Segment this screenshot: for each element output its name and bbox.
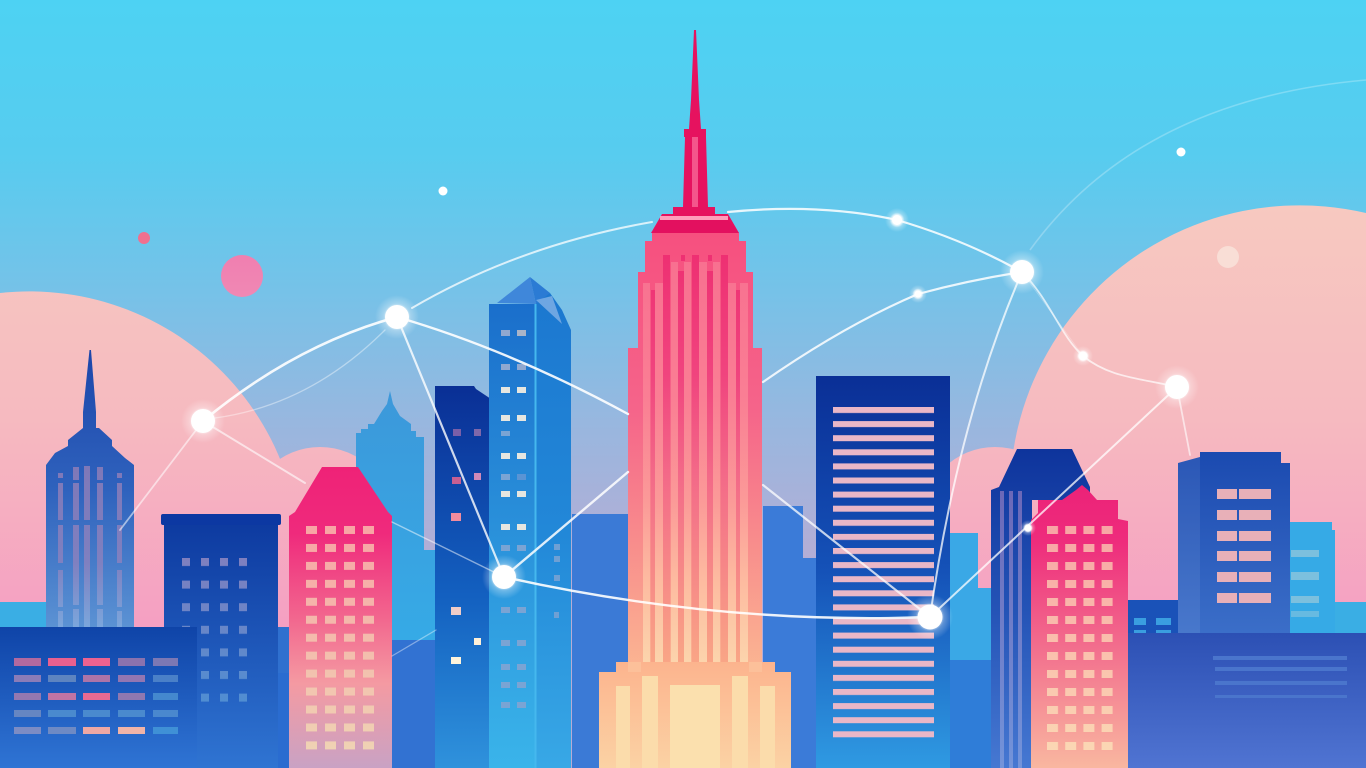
light stripes [643, 262, 748, 662]
roof cap [161, 514, 281, 525]
window rows [14, 658, 178, 734]
dark stripes [651, 255, 740, 662]
windows [451, 429, 481, 664]
windows [501, 330, 560, 708]
tower windows [58, 466, 122, 627]
windows [1047, 526, 1113, 750]
spire highlight [692, 137, 698, 207]
window stripes [833, 407, 934, 740]
right office tower [1178, 452, 1290, 636]
windows [306, 526, 374, 750]
network lines [120, 209, 1190, 656]
tower base [599, 662, 791, 768]
central art deco tower [599, 30, 791, 768]
dark tall tower [435, 386, 497, 768]
dark block tower [161, 514, 281, 768]
base panels [616, 662, 775, 768]
windows [182, 558, 247, 702]
pink tower left [289, 467, 392, 768]
floating dots [138, 148, 1239, 297]
small block [1128, 600, 1180, 636]
back blocks [278, 391, 992, 768]
left spire tower [46, 350, 134, 630]
shaft [599, 233, 791, 768]
stripes [1000, 491, 1022, 768]
spire [651, 30, 739, 233]
windows [1217, 489, 1271, 603]
sun hills [0, 205, 1366, 630]
pink tower right [1031, 485, 1128, 768]
striped office tower [816, 376, 950, 768]
light block far right [1290, 522, 1335, 640]
faint arc in the sky [1030, 80, 1366, 250]
crown band [652, 220, 739, 233]
roof [497, 277, 536, 304]
windows [1291, 550, 1319, 617]
low left block [0, 627, 197, 768]
low right block [1128, 633, 1366, 768]
blue glass tower [489, 277, 571, 768]
horizon bands [0, 602, 1366, 637]
dark tower right [991, 449, 1090, 768]
network nodes [181, 208, 1199, 640]
